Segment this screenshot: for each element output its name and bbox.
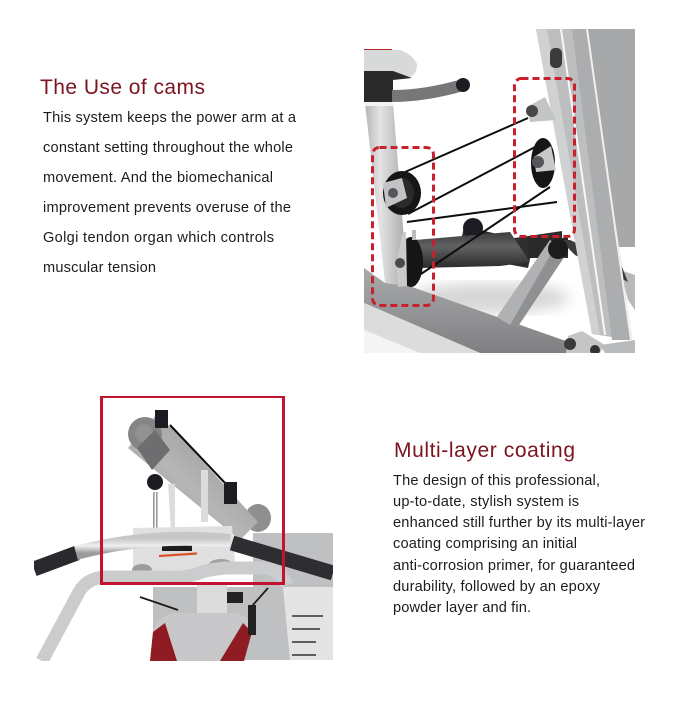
text block: cams description: muscular tension	[43, 260, 156, 276]
right pulley	[531, 138, 556, 188]
rear tube	[620, 270, 635, 310]
cables	[405, 118, 557, 274]
left upright post	[365, 103, 408, 288]
centre plate with logo	[132, 526, 235, 571]
foot bracket and bolts	[564, 331, 635, 355]
base rail	[364, 268, 566, 353]
text block: coating description: enhanced still further by its multi-layer	[393, 515, 645, 531]
arm cable and brackets	[155, 410, 237, 504]
text block: coating description: coating comprising an initial	[393, 536, 577, 552]
text block: cams description	[43, 110, 297, 276]
upper left pulley	[383, 171, 421, 215]
peg	[245, 504, 271, 532]
text block: coating description: The design of this professional,	[393, 473, 600, 489]
dashed highlight: right pulleys	[514, 78, 574, 236]
text block: coating description: powder layer and fin.	[393, 600, 531, 616]
dashed highlight: left pulleys	[372, 148, 434, 306]
seat back pad	[150, 613, 252, 661]
text block: coating description: up-to-date, stylish system is	[393, 494, 579, 510]
lower left pulley	[395, 230, 423, 287]
text block: coating description: anti-corrosion primer, for guaranteed	[393, 558, 635, 574]
text block: cams description: Golgi tendon organ which controls	[43, 230, 274, 246]
grey back panel	[586, 29, 635, 247]
text block: cams description: This system keeps the power arm at a	[43, 110, 297, 126]
diagonal strut	[497, 240, 567, 328]
horizontal dark tube	[415, 218, 628, 282]
weight stack panel	[153, 533, 333, 660]
arm supports	[168, 470, 208, 529]
handle bar	[392, 78, 470, 96]
seat cushion	[364, 49, 417, 102]
text block: cams description: constant setting throughout the whole	[43, 140, 293, 156]
floor shadow	[410, 283, 570, 313]
pivot arm	[128, 415, 258, 540]
red highlight square	[102, 396, 284, 584]
illustration: multi-layer coating machine	[34, 396, 333, 661]
heading: The Use of cams: The Use of cams	[40, 76, 205, 99]
upper handle bar	[34, 539, 333, 573]
text block: cams description: improvement prevents overuse of the	[43, 200, 291, 216]
text block: cams description: movement. And the biomechanical	[43, 170, 273, 186]
lower frame arch	[42, 568, 287, 661]
tall steel column	[536, 29, 632, 340]
illustration: cam pulley mechanism	[364, 29, 635, 355]
text block: coating description	[393, 473, 645, 616]
text block: coating description: durability, followed by an epoxy	[393, 579, 601, 595]
centre column	[197, 585, 227, 615]
right upper bracket bolt	[526, 97, 556, 122]
seat straps	[140, 588, 268, 610]
hanging ball and chain	[147, 474, 163, 530]
heading: Multi-layer coating: Multi-layer coating	[394, 439, 575, 462]
